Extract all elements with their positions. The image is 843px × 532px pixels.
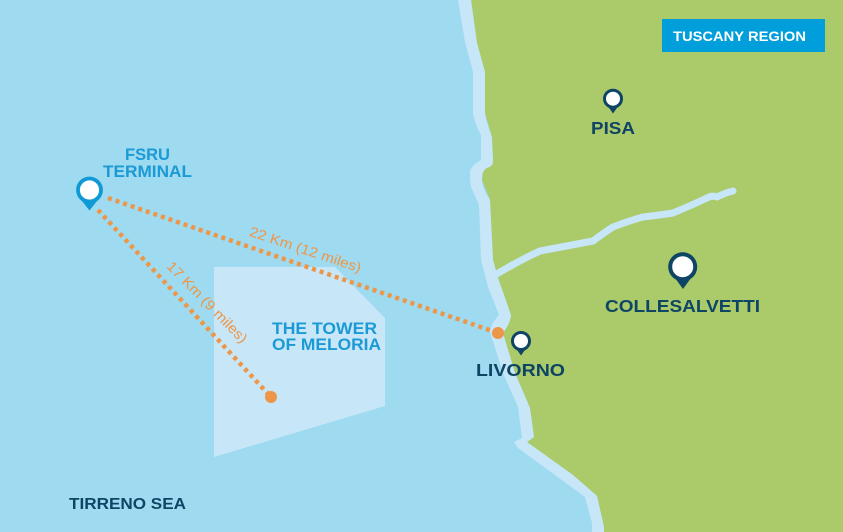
- label: FSRU Terminal: FSRU: [125, 146, 170, 164]
- badge: Tuscany region: TUSCANY REGION: [673, 28, 806, 44]
- label: FSRU Terminal: TERMINAL: [103, 163, 192, 181]
- coastline band: [458, 0, 604, 532]
- route: 17 km dotted line: [98, 210, 271, 397]
- label: 22 km: 22 Km (12 miles): [248, 223, 364, 275]
- badge: Tuscany region: [662, 19, 825, 52]
- label: The Tower of Meloria: [272, 320, 381, 354]
- icon: Collesalvetti pin: [670, 254, 695, 289]
- icon: Pisa pin: [604, 90, 622, 114]
- label: Pisa: PISA: [591, 118, 635, 138]
- icon: Livorno pin: [512, 332, 530, 356]
- label: 17 km: 17 Km (9 miles): [164, 258, 251, 346]
- endpoint: Livorno: [492, 327, 504, 339]
- label: FSRU Terminal: [103, 146, 192, 181]
- label: The Tower of Meloria: OF MELORIA: [272, 336, 381, 354]
- route: 22 km dotted line: [108, 198, 498, 333]
- label: Collesalvetti: COLLESALVETTI: [605, 296, 760, 316]
- icon: FSRU pin: [78, 178, 101, 210]
- land: Tuscany: [471, 0, 843, 532]
- label: The Tower of Meloria: THE TOWER: [272, 320, 377, 338]
- label: Livorno: LIVORNO: [476, 360, 565, 380]
- river: [495, 191, 733, 275]
- area: the Tower of Meloria: [214, 267, 385, 457]
- label: Tirreno Sea: TIRRENO SEA: [69, 496, 186, 513]
- endpoint: Meloria: [265, 391, 277, 403]
